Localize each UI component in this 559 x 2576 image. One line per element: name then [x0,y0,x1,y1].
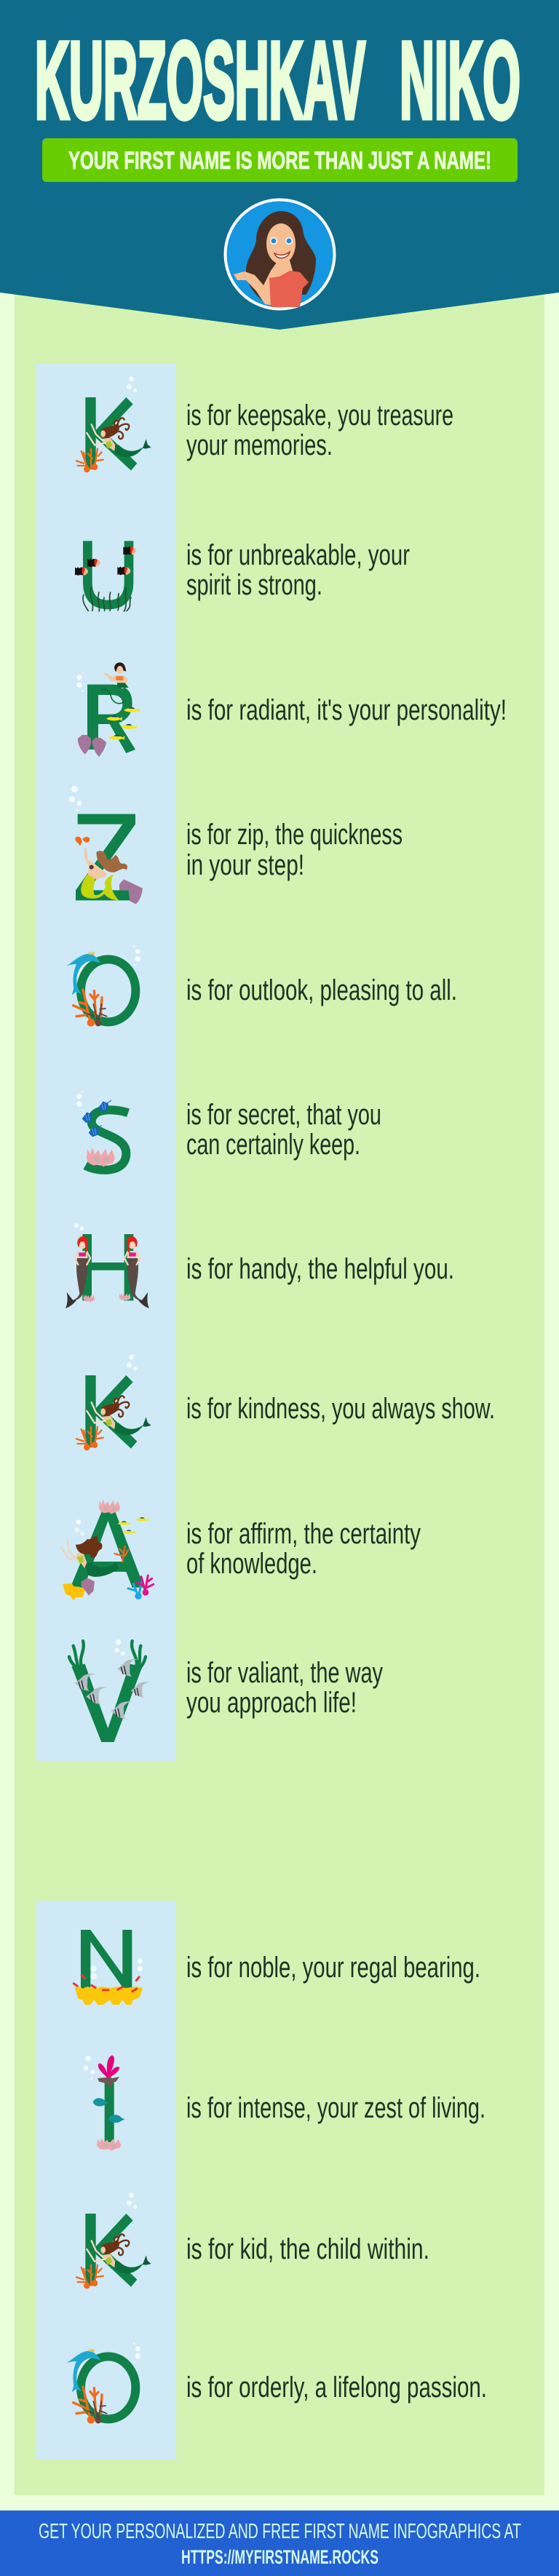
footer [0,2511,559,2576]
caption line 2: of knowledge. [186,1548,317,1580]
subtitle bar [42,138,518,182]
avatar: cartoon woman in circle [226,199,335,309]
letter U illustration [75,541,136,612]
caption: is for kid, the child within. [186,2233,429,2265]
caption: is for handy, the helpful you. [186,1253,454,1285]
row U: unbreakable [75,539,410,612]
row K: kid [76,2193,429,2289]
caption: is for affirm, the certainty [186,1518,421,1550]
letter H illustration [66,1223,149,1308]
letter V illustration [69,1639,150,1742]
letter N illustration [72,1930,143,2005]
letter A illustration [61,1500,154,1600]
letter S illustration [76,1092,128,1170]
row K: kindness [76,1355,495,1450]
row N: noble [72,1930,480,2005]
caption: is for zip, the quickness [186,819,403,851]
panel: letter column for first name [36,364,176,1761]
letter R illustration [76,662,140,757]
caption line 2: your memories. [186,429,333,461]
caption line 2: you approach life! [186,1687,357,1719]
caption: is for secret, that you [186,1099,381,1131]
letter O illustration [66,2342,140,2424]
row O: orderly [66,2342,487,2424]
row V: valiant [69,1639,383,1742]
letter Z illustration [69,786,143,904]
letter K illustration [76,377,151,472]
caption: is for outlook, pleasing to all. [186,974,457,1006]
header banner [0,0,559,330]
footer url: HTTPS://MYFIRSTNAME.ROCKS [181,2546,378,2568]
letter K illustration [76,1355,151,1450]
caption line 2: in your step! [186,849,304,881]
row I: intense [84,2055,485,2150]
caption line 2: can certainly keep. [186,1129,360,1161]
row O: outlook [66,945,457,1027]
letter K illustration [76,2193,151,2289]
row Z: zip [69,786,403,904]
letter O illustration [66,945,140,1027]
row K: keepsake [76,377,453,472]
caption: is for valiant, the way [186,1657,383,1689]
row A: affirm [61,1500,421,1600]
caption: is for unbreakable, your [186,539,410,571]
row R: radiant [76,662,507,757]
header chevron background [0,0,559,330]
panel: letter column for second name [36,1901,176,2460]
caption line 2: spirit is strong. [186,569,322,601]
footer bar [0,2511,559,2576]
letter I illustration [84,2055,125,2150]
caption: is for keepsake, you treasure [186,399,453,432]
row S: secret [76,1092,381,1170]
row H: handy [66,1223,454,1308]
